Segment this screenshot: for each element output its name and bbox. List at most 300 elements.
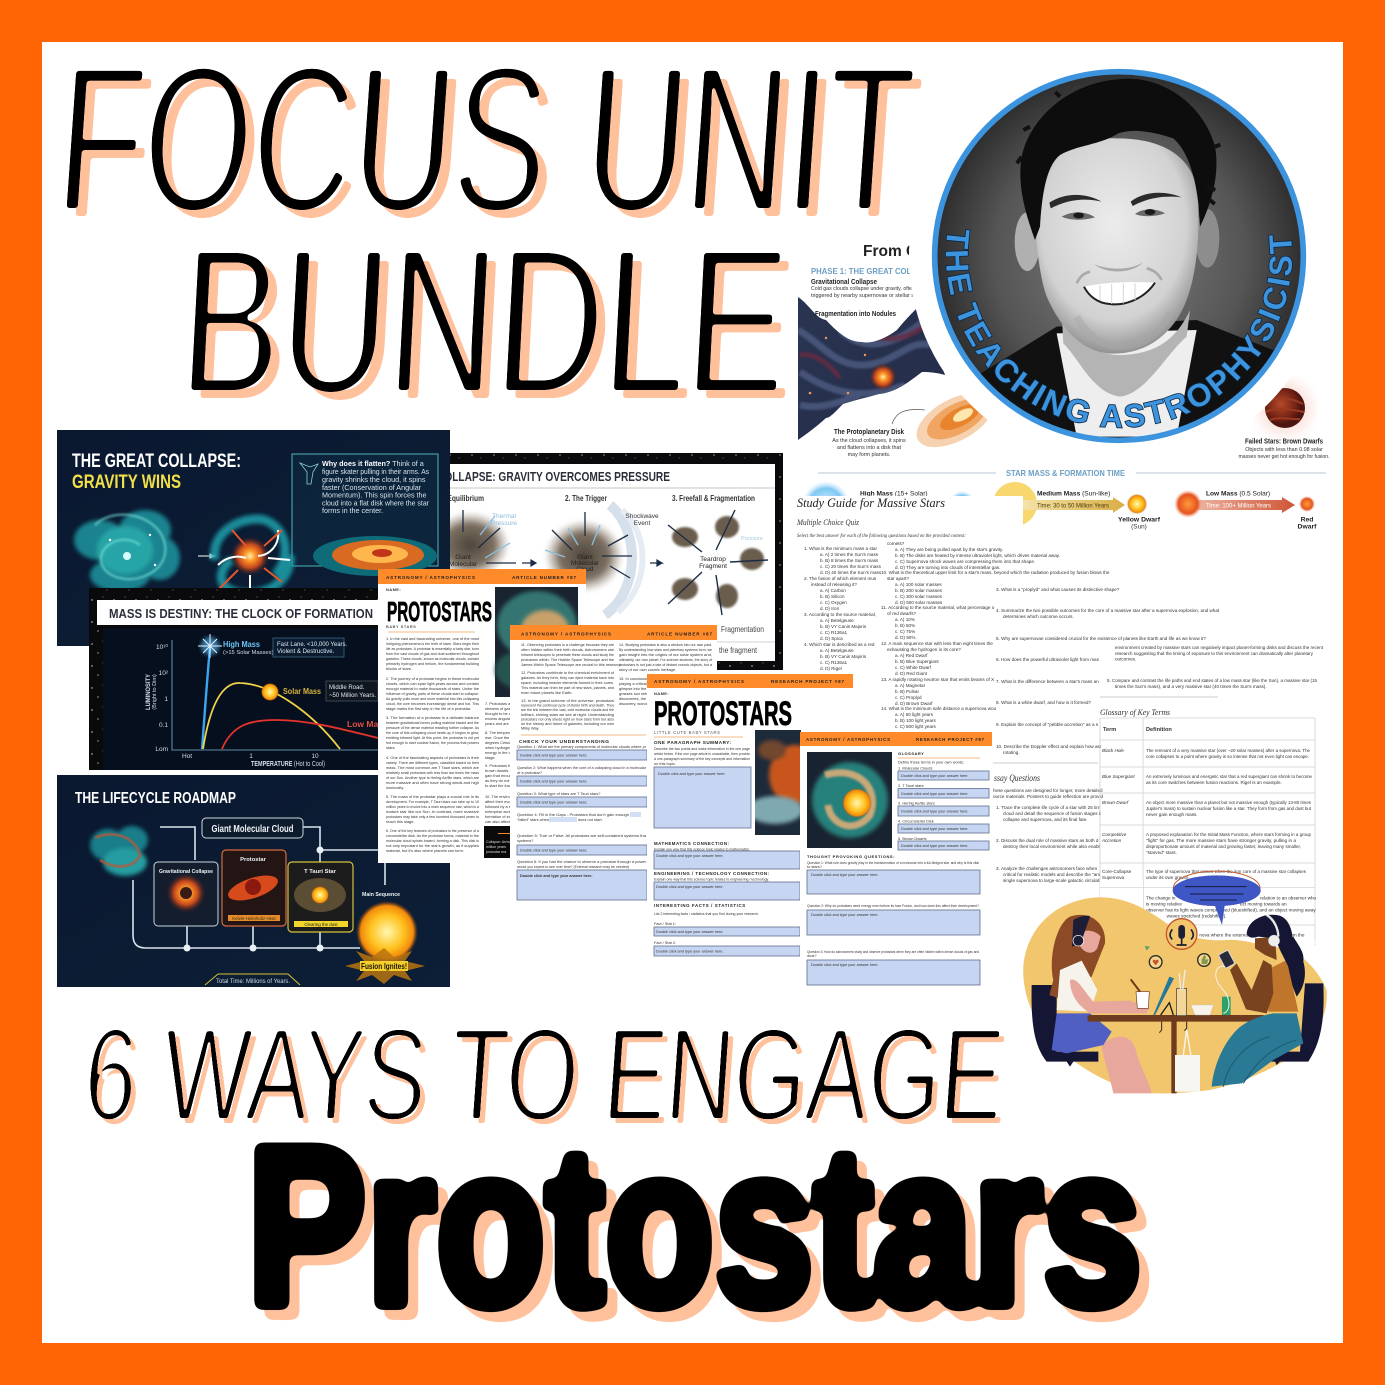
article second column: to start the fusi <box>485 783 511 788</box>
article body text: variety. There are different types, classified based on their <box>386 760 480 765</box>
chairs <box>1032 983 1324 1067</box>
article body text: luminosity. <box>386 785 404 790</box>
glossary form: Double click and type your answer here. <box>901 810 969 814</box>
essay questions: 1. Trace the complete life cycle of a star with 25 tim <box>996 805 1100 810</box>
title: Bundle: BUNDLE <box>185 214 802 446</box>
orange header: ASTRONOMY / ASTROPHYSICS <box>806 737 890 742</box>
summary section: Describe the two points and make information in the one page <box>654 746 750 751</box>
short answer questions: 6. How does the powerful ultraviolet light from mas <box>996 657 1100 662</box>
article image <box>495 587 578 697</box>
study guide document: Select the best answer for each of the following questions based on the provided context: <box>797 534 966 539</box>
quiz column 2: of red dwarfs? <box>887 611 917 616</box>
fragmentation diagram <box>668 510 768 615</box>
interesting facts: Fact / Stat 1: <box>654 921 676 926</box>
slide heading: THE GREAT COLLAPSE: <box>72 451 241 472</box>
glossary table: "starved" stars. <box>1146 850 1177 855</box>
callout: why does it flatten: forms in the center. <box>322 506 383 515</box>
article body continued: often hidden within their birth clouds. Astronomers use <box>521 647 614 652</box>
quiz column 2: b. B) The disks are heated by intense ultraviolet light, which drives material away. <box>895 553 1060 558</box>
slide: mass is destiny <box>89 588 389 770</box>
quiz column 2: a. A) Magnetar <box>895 683 926 688</box>
quiz column 1: a. A) Betelgeuse <box>820 618 854 623</box>
check your understanding <box>517 739 647 900</box>
quiz column 1: a. A) 2 times the Sun's mass <box>820 552 879 557</box>
quiz column 1: c. C) R136a1 <box>820 660 848 665</box>
article body continued: 12. Protostars contribute to the chemical enrichment of <box>521 670 615 675</box>
article body text: protostars may take only a few hundred thousand years to <box>386 814 479 819</box>
article body text: pressure of the dense material resisting further collapse. As <box>386 725 479 730</box>
glossary table: as its core switches between fusion reactions. Rigel is an example. <box>1146 780 1282 785</box>
essay questions: ssay Questions <box>994 773 1040 783</box>
portrait photo <box>930 67 1310 453</box>
mathematics connection <box>654 841 800 869</box>
article second column: energy in the co <box>485 750 513 755</box>
article second column: 8. The temperat <box>485 730 513 735</box>
quiz column 2: d. D) Red Giant <box>895 671 928 676</box>
high mass row: High Mass (15+ Solar) <box>860 490 928 498</box>
article second column: brown dwarfs. T <box>485 768 513 773</box>
quiz column 2: c. C) Proplyd <box>895 695 922 700</box>
article page 1 <box>378 569 586 863</box>
article body text <box>386 636 480 853</box>
article second column: degrees Celsius, <box>485 740 514 745</box>
glossary table: The type of supernova that occurs when the iron core of a massive star collapses <box>1146 869 1307 874</box>
engineering connection: Double click and type your answer here. <box>656 885 724 889</box>
article body continued: protostars within. The Hubble Space Telescope and the <box>521 657 614 662</box>
luminosity chart: High Mass <box>223 639 260 649</box>
article page 1: BABY STARS <box>386 625 416 629</box>
article body text: 5. The mass of the protostar plays a crucial role in its <box>386 794 479 799</box>
research project page 1: LITTLE CUTE BABY STARS <box>654 730 721 735</box>
article body text: emitting infrared light. At this point, the protostar is not yet <box>386 735 480 740</box>
check your understanding: Question 6: If you had the chance to observe a protostar through a power <box>517 859 647 864</box>
trigger diagram: Cloud <box>577 566 594 573</box>
essay questions: hese questions are designed for longer, more detailed <box>993 788 1103 793</box>
quiz column 2: c. C) 500 light years <box>895 724 937 729</box>
short answer questions: 10. Describe the Doppler effect and explain how ast <box>996 744 1102 749</box>
column headings: 2. The Trigger <box>565 493 608 503</box>
article body text: the core of this collapsing cloud heats up, it begins to glow, <box>386 730 479 735</box>
medium mass row <box>993 482 1161 530</box>
research project page 1 <box>647 674 853 964</box>
medium mass row: Medium Mass (Sun-like) <box>1037 490 1110 498</box>
quiz column 2: c. C) Supernova shock waves are compressing them into that shape. <box>895 559 1035 564</box>
glossary form: 1. Molecular Clouds <box>898 766 932 770</box>
microphone icon <box>1166 919 1197 949</box>
slide: mass is destiny: MASS IS DESTINY: THE CLOCK OF FORMATION <box>109 606 373 621</box>
slide footer labels <box>700 625 775 655</box>
summary section: ONE PARAGRAPH SUMMARY: <box>654 740 732 745</box>
article body continued: infrared telescopes to penetrate these clouds and study the <box>521 652 614 657</box>
summary section: Double click and type your answer here. <box>658 772 726 776</box>
glossary table: "fight" for gas. The more massive stars have stronger gravity, pulling in a <box>1146 838 1296 843</box>
quiz column 2: c. C) 300 solar masses <box>895 594 943 599</box>
article body text: not only important for the star's growth, as it supplies <box>386 843 479 848</box>
essay questions: 2. Discuss the dual role of massive stars as both d <box>996 838 1099 843</box>
luminosity chart: 1 <box>164 696 168 703</box>
high mass star marker <box>198 634 222 658</box>
luminosity chart: LUMINOSITY <box>145 673 152 710</box>
article body text: between gravitational forces pulling material inward and the <box>386 720 479 725</box>
glossary table: never gain enough mass. <box>1146 812 1198 817</box>
giant molecular cloud label <box>202 818 303 838</box>
glossary form: Double click and type your answer here. <box>901 792 969 796</box>
research project page 1: NAME: <box>654 691 669 696</box>
glossary table: Blue Supergiant <box>1102 774 1135 779</box>
equilibrium diagram: Thermal <box>492 513 516 520</box>
article body continued: galaxies. As they form, they can eject material back into <box>521 675 614 680</box>
short answer questions <box>993 587 1220 763</box>
quiz column 1: instead of releasing it? <box>811 582 857 587</box>
article second column: 10. The environ <box>485 794 512 799</box>
quiz column 1: b. B) VY Canis Majoris <box>820 654 867 659</box>
article body continued: discovery, wonde <box>619 701 649 706</box>
orange header <box>510 625 717 640</box>
yellow blob <box>1023 897 1327 1093</box>
quiz column 2: a. A) 50 light years <box>895 712 934 717</box>
article body text: 1. In the vast and fascinating universe, one of the most <box>386 636 480 641</box>
glossary heading: Glossary of Key Terms <box>1100 707 1171 717</box>
glossary form: Double click and type your answer here. <box>901 844 969 848</box>
card: t tauri star: Clearing the dust <box>304 922 338 927</box>
nebula artwork <box>798 295 948 445</box>
short answer questions: 8. What is a white dwarf, and how is it formed? <box>996 700 1091 705</box>
article body text: primarily hydrogen and helium, the fundamental building <box>386 661 479 666</box>
low mass row: Red <box>1301 516 1313 524</box>
article body text: more massive and often have strong winds and high <box>386 780 479 785</box>
quiz column 2: b. B) 50% <box>895 623 915 628</box>
short answer questions: 5. Why are supernovae considered crucial for the existence of planets like Earth and life as we know it? <box>996 636 1206 641</box>
quiz column 2: d. D) 500 solar masses <box>895 600 943 605</box>
phase 1 text: PHASE 1: THE GREAT COLL <box>811 266 916 276</box>
protoplanetary disk caption: The Protoplanetary Disk <box>834 429 904 436</box>
article second column: when hydrogen <box>485 745 512 750</box>
fragmentation label: Fragmentation into Nodules <box>815 309 896 318</box>
brown dwarf icon <box>1258 381 1312 435</box>
article body text: mature star like our Sun. In contrast, more massive <box>386 809 479 814</box>
quiz column 2: a. A) 10% <box>895 617 915 622</box>
quiz column 1: d. D) Spica <box>820 636 843 641</box>
luminosity chart: (Bright to Dim) <box>152 674 158 710</box>
middle road callout: Middle Road. <box>329 685 365 691</box>
article page 1: NAME: <box>386 587 401 592</box>
luminosity chart: Solar Mass <box>283 686 321 696</box>
swirl nebula image <box>807 752 892 848</box>
article second column: followed by a su <box>485 804 513 809</box>
fusion ignites burst: Fusion Ignites! <box>361 961 407 971</box>
orange header: RESEARCH PROJECT #87 <box>771 679 844 684</box>
check your understanding: Question 3: What type of stars are T Tauri stars? <box>517 791 601 796</box>
article second column: thought to be cr <box>485 711 513 716</box>
article body text: 3. The formation of a protostar is a delicate balance <box>386 715 479 720</box>
low mass row <box>1174 490 1317 530</box>
brown dwarf caption: Objects with less than 0.08 solar <box>1245 447 1323 453</box>
right column essay text <box>1100 643 1326 697</box>
article body continued: grasses sun sets <box>619 691 648 696</box>
podcast illustration <box>1023 871 1327 1093</box>
glossary table: Supernova <box>1102 875 1125 880</box>
table and items <box>1087 970 1266 1093</box>
article body text: influence of gravity, parts of these clouds start to collapse. <box>386 691 479 696</box>
article body text: million years to evolve into a main sequence star, which is a <box>386 804 480 809</box>
thought provoking questions: Double click and type your answer here. <box>811 873 879 877</box>
glossary table: Doppler Effect <box>1103 895 1133 900</box>
roadmap nodes <box>184 846 324 952</box>
interesting facts: List 2 interesting facts / statistics that you find during your research. <box>654 911 759 916</box>
summary section <box>654 740 751 828</box>
fast lane callout <box>273 638 348 657</box>
article body continued: discoveries, the <box>619 696 646 701</box>
heading: 6 ways to engage: 6 WAYS TO ENGAGE <box>80 1001 1008 1149</box>
glossary table: A proposed explanation for the Initial Mass Function, where stars forming in a group <box>1146 832 1311 837</box>
orange header <box>378 569 586 584</box>
solar mass marker <box>261 683 279 701</box>
glossary row seen through the illustration cutout: observer has its light waves compressed (blueshifted), and an object moving away <box>1146 907 1316 912</box>
column headings: 1. Equilibrium <box>440 493 484 503</box>
essay questions: single supernova to large-scale galactic circulati <box>1003 878 1100 883</box>
medium mass row: (Sun) <box>1131 524 1147 530</box>
quiz column 2: a. A) They are being pulled apart by the star's gravity. <box>895 547 1003 552</box>
chat bubble <box>1173 871 1261 925</box>
article body text: stars. <box>386 745 396 750</box>
slide heading: COLLAPSE: GRAVITY OVERCOMES PRESSURE <box>437 469 670 484</box>
quiz column 2: star apart? <box>887 576 909 581</box>
orange header <box>647 674 853 688</box>
essay questions: destroy their local environment while also enabl <box>1003 844 1100 849</box>
slide heading <box>72 451 241 493</box>
article body text: from the vast clouds of gas and dust scattered throughout <box>386 651 480 656</box>
article body continued: ultimately, our own planet. For science students, the story of <box>619 657 713 662</box>
quiz column 1: c. C) 20 times the Sun's mass <box>820 564 882 569</box>
article body text: relatively small protostars with less than two times the mass <box>386 770 479 775</box>
article body text: 4. One of the fascinating aspects of protostars is their <box>386 755 480 760</box>
total time footer: Total Time: Millions of Years. <box>216 978 290 985</box>
glossary table <box>1100 718 1315 945</box>
interesting facts: Fact / Stat 2: <box>654 940 676 945</box>
card: protostar: Protostar <box>240 857 267 863</box>
callout: why does it flatten: faster (Conservation of Angular <box>322 483 422 492</box>
engineering connection <box>654 871 800 900</box>
medium mass row: Time: 30 to 50 Million Years <box>1037 502 1110 510</box>
essay questions <box>993 773 1103 883</box>
article second column: years and are of <box>485 721 514 726</box>
quiz column 2: b. B) Blue Supergiant <box>895 659 939 664</box>
glossary row seen through the illustration cutout: relation to an observer who <box>1260 895 1317 900</box>
article body continued: are the link between the vast, cold molecular clouds and the <box>521 707 614 712</box>
black info box: protostar ma <box>486 850 506 854</box>
slide heading: THE LIFECYCLE ROADMAP <box>75 790 236 807</box>
summary section: on this topic. <box>654 761 676 766</box>
heading: Protostars: Protostars <box>257 1109 1152 1362</box>
callout: why does it flatten: gravity shrinks the cloud, it spins <box>322 475 426 484</box>
protoplanetary disk artwork <box>892 382 1002 458</box>
mathematics connection: MATHEMATICS CONNECTION: <box>654 841 730 846</box>
article body text: mass. The most common are T Tauri stars, which are <box>386 765 479 770</box>
quiz column 2: a. A) 100 solar masses <box>895 582 942 587</box>
callout: why does it flatten: cloud into a flat disk where the star <box>322 498 430 508</box>
article title: PROTOSTARS <box>387 596 492 627</box>
slide footer labels: Fragmentation <box>721 625 764 634</box>
check your understanding: Question 1: What are the primary components of molecular clouds where pr <box>517 744 647 749</box>
title: Focus Unit: FOCUS UNIT <box>51 23 920 256</box>
article body text: galaxies. These clouds, known as molecular clouds, contain <box>386 656 479 661</box>
protoplanetary disk caption: may form planets. <box>848 452 890 458</box>
orange header: ARTICLE NUMBER #87 <box>512 575 576 580</box>
quiz column 2: 13. A rapidly rotating neutron star that emits beams of X <box>881 677 994 682</box>
column headings: 3. Freefall & Fragmentation <box>672 493 755 503</box>
article body text: blocks of stars. <box>386 666 412 671</box>
glossary row seen through the illustration cutout: is moving relative <box>1146 901 1182 906</box>
fast lane callout: Violent & Destructive. <box>277 649 335 655</box>
article body text: clouds, which can span light-years across and contain <box>386 681 479 686</box>
quiz column 1: a. A) Betelgeuse <box>820 648 854 653</box>
quiz column 2: b. B) Pulsar <box>895 689 919 694</box>
column headings <box>440 493 755 503</box>
article second column: gain that enough <box>485 773 514 778</box>
glossary table: An object more massive than a planet but not massive enough (typically 13-80 times <box>1146 800 1312 805</box>
glossary row seen through the illustration cutout: from the <box>1287 933 1305 938</box>
fast lane callout: Fast Lane. <10,000 Years. <box>277 642 348 648</box>
glossary table: Term <box>1103 727 1116 733</box>
short answer questions: 9. Explain the concept of "pebble accretion" as a n <box>996 722 1099 727</box>
trigger diagram: Giant <box>577 554 593 561</box>
article second column: 9. Protostars tha <box>485 763 514 768</box>
essay questions: cloud and detail the sequence of fusion stages it <box>1003 811 1102 816</box>
article second column: affect their evol <box>485 799 511 804</box>
callout: why does it flatten: Why does it flatten? Think of a <box>322 459 424 468</box>
glossary form: Define these terms in your own words: <box>898 760 964 764</box>
slide heading bar <box>97 600 387 625</box>
article second column: enterprise acres <box>485 809 513 814</box>
mathematics connection: Double click and type your answer here. <box>656 854 724 858</box>
check your understanding: Double click and type your answer here. <box>520 800 588 804</box>
article body text: intriguing phenomena is the birth of stars. Stars begin their <box>386 641 480 646</box>
check your understanding: Double click and type your answer here. <box>520 874 593 878</box>
check your understanding: CHECK YOUR UNDERSTANDING <box>519 739 609 745</box>
check your understanding: Question 4: Fill in the Gaps - Protostars that don't gain enough <box>517 812 629 817</box>
phase 1 text: triggered by nearby supernovae or stellar sh <box>811 293 917 299</box>
article body continued: 13. In the grand scheme of the universe, protostars <box>521 698 614 703</box>
right column essay text: environment created by massive stars can negatively impact planet-forming disks and discuss the recent <box>1115 645 1324 650</box>
author portrait badge <box>909 68 1306 444</box>
card: gravitational collapse: Gravitational Collapse <box>159 869 214 875</box>
quiz column 2: c. C) White Dwarf <box>895 665 932 670</box>
fusion ignites burst <box>345 948 425 984</box>
infographic: from cloud to star <box>798 238 1333 533</box>
article body text: hot enough to start nuclear fusion, the process that powers <box>386 740 479 745</box>
article body text: molecular cloud spirals inward, forming a disk. This disk is <box>386 838 479 843</box>
glossary table: Definition <box>1146 727 1172 733</box>
quiz column 2: c. C) 75% <box>895 629 915 634</box>
check your understanding: Double click and type your answer here. <box>520 780 588 784</box>
check your understanding: "failed" stars where <box>517 817 550 822</box>
curved badge text: THE TEACHING ASTROPHYSICIST <box>944 229 1293 428</box>
quiz column 1: 2. The fusion of which element mus <box>804 576 877 581</box>
article body text: reach this stage. <box>386 819 415 824</box>
reaction icons <box>1145 946 1210 968</box>
thought provoking questions: Question 3: How do astronomers study and observe protostars when they are often hidden within dense clouds of gas and <box>807 949 979 954</box>
trigger diagram: Shockwave <box>625 513 659 520</box>
article second column: rise. Once the te <box>485 735 514 740</box>
glossary row seen through the illustration cutout <box>1100 880 1317 943</box>
thought provoking questions: Question 1: What role does gravity play in the transformation of a molecular into a full-fledged star, and why is this vital <box>807 860 979 865</box>
article body continued <box>521 642 713 731</box>
title: Focus Unit: FOCUS UNIT <box>60 31 929 264</box>
short answer questions: rotating. <box>1003 750 1020 755</box>
right column essay text: times the Sun's mass), and a very massive star (40 times the Sun's mass). <box>1115 684 1267 689</box>
article body text: 2. The journey of a protostar begins in these molecular <box>386 676 480 681</box>
quiz column 1 <box>804 546 882 671</box>
luminosity chart: (>15 Solar Masses) <box>223 650 273 656</box>
article second column: formation of ea <box>485 814 512 819</box>
luminosity chart: Low Mass <box>347 719 388 729</box>
glossary table: Jupiter's mass) to sustain nuclear fusion like a star. They form from gas and dust but <box>1146 806 1312 811</box>
check your understanding: systems? <box>517 838 534 843</box>
quiz column 2: d. D) 90% <box>895 635 915 640</box>
glossary row seen through the illustration cutout: waves stretched (redshifted). <box>1167 913 1226 918</box>
equilibrium diagram: Giant <box>455 554 471 561</box>
quiz column 1: b. B) 8 times the Sun's mass <box>820 558 879 563</box>
middle road callout <box>326 681 378 701</box>
fragmentation diagram: Pressure <box>741 536 763 542</box>
equilibrium diagram: Molecular <box>449 561 478 568</box>
orange header: ARTICLE NUMBER #87 <box>647 632 712 636</box>
low mass row: Dwarf <box>1298 524 1317 530</box>
orange header: ASTRONOMY / ASTROPHYSICS <box>654 679 744 684</box>
article second column: 7. Protostars al <box>485 701 511 706</box>
trigger diagram: Molecular <box>571 560 600 567</box>
arrow <box>329 554 345 558</box>
glossary form: GLOSSARY <box>898 751 924 756</box>
fragmentation diagram: Teardrop <box>700 556 726 563</box>
glossary row seen through the illustration cutout: The change in <box>1146 895 1176 900</box>
quiz column 1: 3. According to the source material, <box>804 612 876 617</box>
article body continued: This material can then be part of new stars, planets, and <box>521 685 614 690</box>
medium mass row: Yellow Dwarf <box>1118 516 1161 524</box>
slide: the great collapse <box>57 430 450 646</box>
equilibrium diagram <box>432 510 536 577</box>
title: Bundle: BUNDLE <box>176 206 793 438</box>
research project page 2 <box>800 732 992 990</box>
card: protostar <box>222 850 286 926</box>
article second column: streams of gas a <box>485 706 515 711</box>
article body continued: glimpse into the <box>619 686 646 691</box>
spiral galaxy <box>215 519 290 595</box>
protoplanetary disk caption: and flattens into a disk that <box>837 445 902 451</box>
protoplanetary disk caption: As the cloud collapses, it spins <box>832 438 906 444</box>
quiz column 2: 14. What is the minimum safe distance a supernova wou <box>881 706 997 711</box>
quiz column 2: exhausting the hydrogen in its core? <box>887 647 961 652</box>
check your understanding: would you expect to see over time? (External research may be needed) <box>517 864 630 869</box>
study guide heading: Study Guide for Massive Stars <box>797 495 945 510</box>
right column essay text: 5. Compare and contrast the life paths and end states of a low mass star (like the Sun), a massive star (15 <box>1107 678 1317 683</box>
main sequence star <box>356 892 418 963</box>
infographic heading: From Cloud <box>863 243 950 260</box>
heading: Protostars: Protostars <box>247 1099 1142 1352</box>
quiz column 2 <box>881 541 1110 729</box>
article body text: of our Sun. Another type is Herbig Ae/Be stars, which are <box>386 775 479 780</box>
article body text: As gravity pulls more and more material into this collapsing <box>386 696 479 701</box>
nebula cloud <box>74 510 180 592</box>
glossary form: 3. Herbig Ae/Be stars <box>898 800 935 806</box>
glossary form: 5. Brown Dwarfs <box>898 836 927 841</box>
slide heading: GRAVITY WINS <box>72 472 181 493</box>
black info box: million years <box>486 845 506 849</box>
thought provoking questions: Double click and type your answer here. <box>811 963 879 967</box>
orange header: RESEARCH PROJECT #87 <box>916 737 985 742</box>
glossary table: under its own gravity. <box>1146 875 1189 880</box>
nebula image <box>755 730 801 835</box>
